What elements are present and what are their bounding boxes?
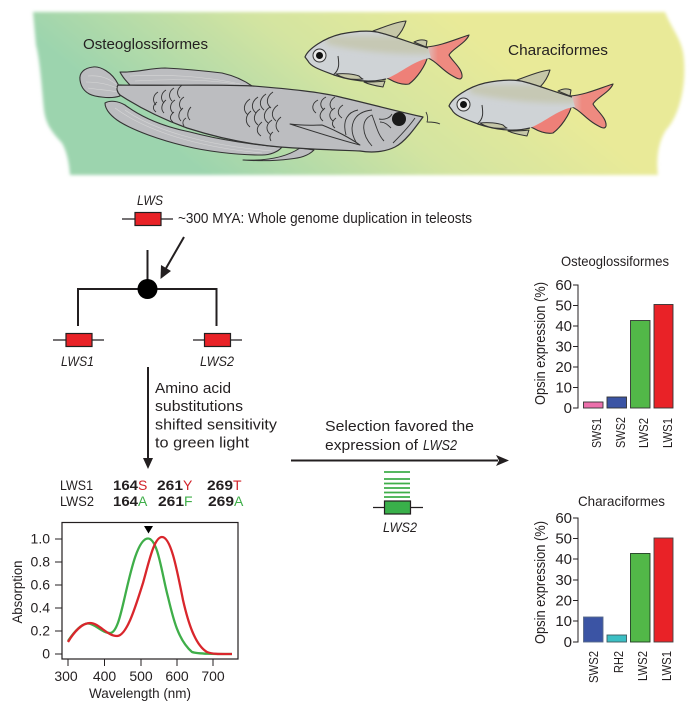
gene: LWS bbox=[122, 192, 173, 226]
chart: absorption spectra: 1.0 bbox=[31, 530, 50, 546]
chart: Osteoglossiformes expression: 50 bbox=[555, 298, 572, 314]
chart: Characiformes expression: LWS2 bbox=[635, 651, 650, 681]
chart: Osteoglossiformes expression: 0 bbox=[564, 400, 572, 417]
chart title: Characiformes bbox=[578, 493, 665, 509]
chart: Osteoglossiformes expression: SWS1 bbox=[589, 418, 604, 448]
gene: LWS2 with expression stripes: LWS2 bbox=[383, 519, 417, 535]
chart: Characiformes expression: 50 bbox=[555, 530, 572, 548]
phylogeny branch bbox=[78, 250, 216, 326]
text: selection bbox=[325, 418, 474, 454]
chart: absorption spectra bbox=[9, 522, 238, 701]
text: selection: Selection favored the bbox=[325, 418, 474, 435]
substitutions table: LWS1 bbox=[60, 477, 93, 493]
text: amino acid substitutions: substitutions bbox=[155, 398, 243, 415]
icon: arowana fish bbox=[80, 67, 440, 161]
chart: Characiformes expression: 0 bbox=[564, 634, 572, 651]
text: amino acid substitutions: to green light bbox=[155, 434, 250, 452]
chart: Characiformes expression: 60 bbox=[555, 510, 572, 527]
label: Osteoglossiformes in banner: Osteoglossiformes bbox=[83, 36, 208, 53]
gene: LWS1 bbox=[53, 334, 104, 369]
substitutions table: S bbox=[138, 477, 147, 493]
chart: absorption spectra: 0.6 bbox=[31, 576, 50, 592]
chart: Osteoglossiformes expression: 40 bbox=[555, 318, 572, 335]
chart: Osteoglossiformes expression: 30 bbox=[555, 338, 572, 356]
text: genome duplication: ~300 MYA: Whole genome duplication in teleosts bbox=[178, 210, 472, 227]
gene: LWS1: LWS1 bbox=[61, 353, 94, 369]
marker: peak triangle bbox=[144, 526, 153, 534]
chart: absorption spectra: 500 bbox=[129, 668, 153, 684]
chart: absorption spectra: 400 bbox=[93, 668, 116, 684]
chart: Osteoglossiformes expression: 10 bbox=[555, 380, 572, 396]
substitutions table: A bbox=[234, 493, 244, 509]
chart: absorption spectra: 0.4 bbox=[31, 600, 50, 616]
icon: right characiform fish bbox=[449, 70, 613, 136]
chart title: Osteoglossiformes bbox=[561, 253, 669, 269]
chart: absorption spectra: 0 bbox=[42, 646, 50, 662]
chart: Characiformes expression: 40 bbox=[555, 551, 572, 568]
curve: LWS2 green bbox=[68, 538, 232, 654]
substitutions table: F bbox=[184, 493, 193, 509]
chart: Osteoglossiformes expression: 60 bbox=[555, 277, 572, 294]
substitutions table: 164 bbox=[113, 477, 138, 493]
chart: absorption spectra: 0.2 bbox=[31, 622, 50, 638]
chart: Characiformes expression: LWS1 bbox=[659, 651, 674, 681]
gene: LWS2 with expression stripes bbox=[373, 472, 423, 535]
substitutions table: 164 bbox=[113, 493, 138, 509]
text: selection: LWS2 bbox=[423, 437, 458, 454]
substitutions table: Y bbox=[183, 477, 193, 493]
chart: Osteoglossiformes expression: LWS2 bbox=[636, 418, 651, 448]
text: amino acid substitutions bbox=[155, 380, 278, 452]
banner background bbox=[33, 12, 684, 175]
chart: Characiformes expression: 20 bbox=[555, 592, 572, 610]
arrow: duplication event bbox=[160, 237, 184, 279]
chart: Osteoglossiformes expression: Opsin expression (%) bbox=[532, 282, 549, 405]
text: amino acid substitutions: shifted sensitivity bbox=[155, 416, 278, 434]
curve: LWS1 red bbox=[68, 537, 232, 654]
chart: Osteoglossiformes expression: LWS1 bbox=[660, 418, 675, 448]
chart: Characiformes expression: 30 bbox=[555, 572, 572, 589]
substitutions table: 269 bbox=[207, 477, 233, 493]
gene: LWS2: LWS2 bbox=[200, 353, 234, 369]
chart: Characiformes expression: RH2 bbox=[611, 651, 626, 673]
chart: Characiformes expression bbox=[532, 493, 674, 683]
chart: Characiformes expression: 10 bbox=[555, 613, 572, 630]
chart: Characiformes expression: SWS2 bbox=[586, 651, 601, 683]
gene: LWS: LWS bbox=[137, 192, 164, 208]
label: Characiformes in banner: Characiformes bbox=[508, 42, 608, 59]
substitutions table: T bbox=[233, 477, 242, 493]
substitutions table: 269 bbox=[208, 493, 234, 509]
chart: absorption spectra: Wavelength (nm) bbox=[89, 685, 191, 701]
text: amino acid substitutions: Amino acid bbox=[155, 380, 231, 397]
chart: Osteoglossiformes expression: 20 bbox=[555, 359, 572, 376]
substitutions table: 261 bbox=[158, 493, 184, 509]
substitutions table bbox=[60, 477, 244, 509]
substitutions table: LWS2 bbox=[60, 493, 94, 509]
chart: Osteoglossiformes expression bbox=[532, 253, 675, 448]
substitutions table: A bbox=[138, 493, 148, 509]
arrow: down to substitutions bbox=[143, 367, 153, 469]
substitutions table: 261 bbox=[157, 477, 183, 493]
text: selection: expression of bbox=[325, 437, 419, 454]
chart: absorption spectra: 600 bbox=[165, 668, 189, 684]
chart: absorption spectra: 300 bbox=[54, 668, 78, 684]
chart: absorption spectra: 0.8 bbox=[31, 554, 50, 570]
chart: Osteoglossiformes expression: SWS2 bbox=[613, 417, 628, 448]
chart: Characiformes expression: Opsin expression (%) bbox=[532, 521, 549, 644]
chart: absorption spectra: Absorption bbox=[9, 560, 25, 624]
chart: absorption spectra: 700 bbox=[201, 668, 225, 684]
icon: top characiform fish bbox=[305, 21, 469, 87]
arrow: selection bbox=[291, 455, 509, 466]
gene: LWS2 bbox=[193, 334, 242, 369]
